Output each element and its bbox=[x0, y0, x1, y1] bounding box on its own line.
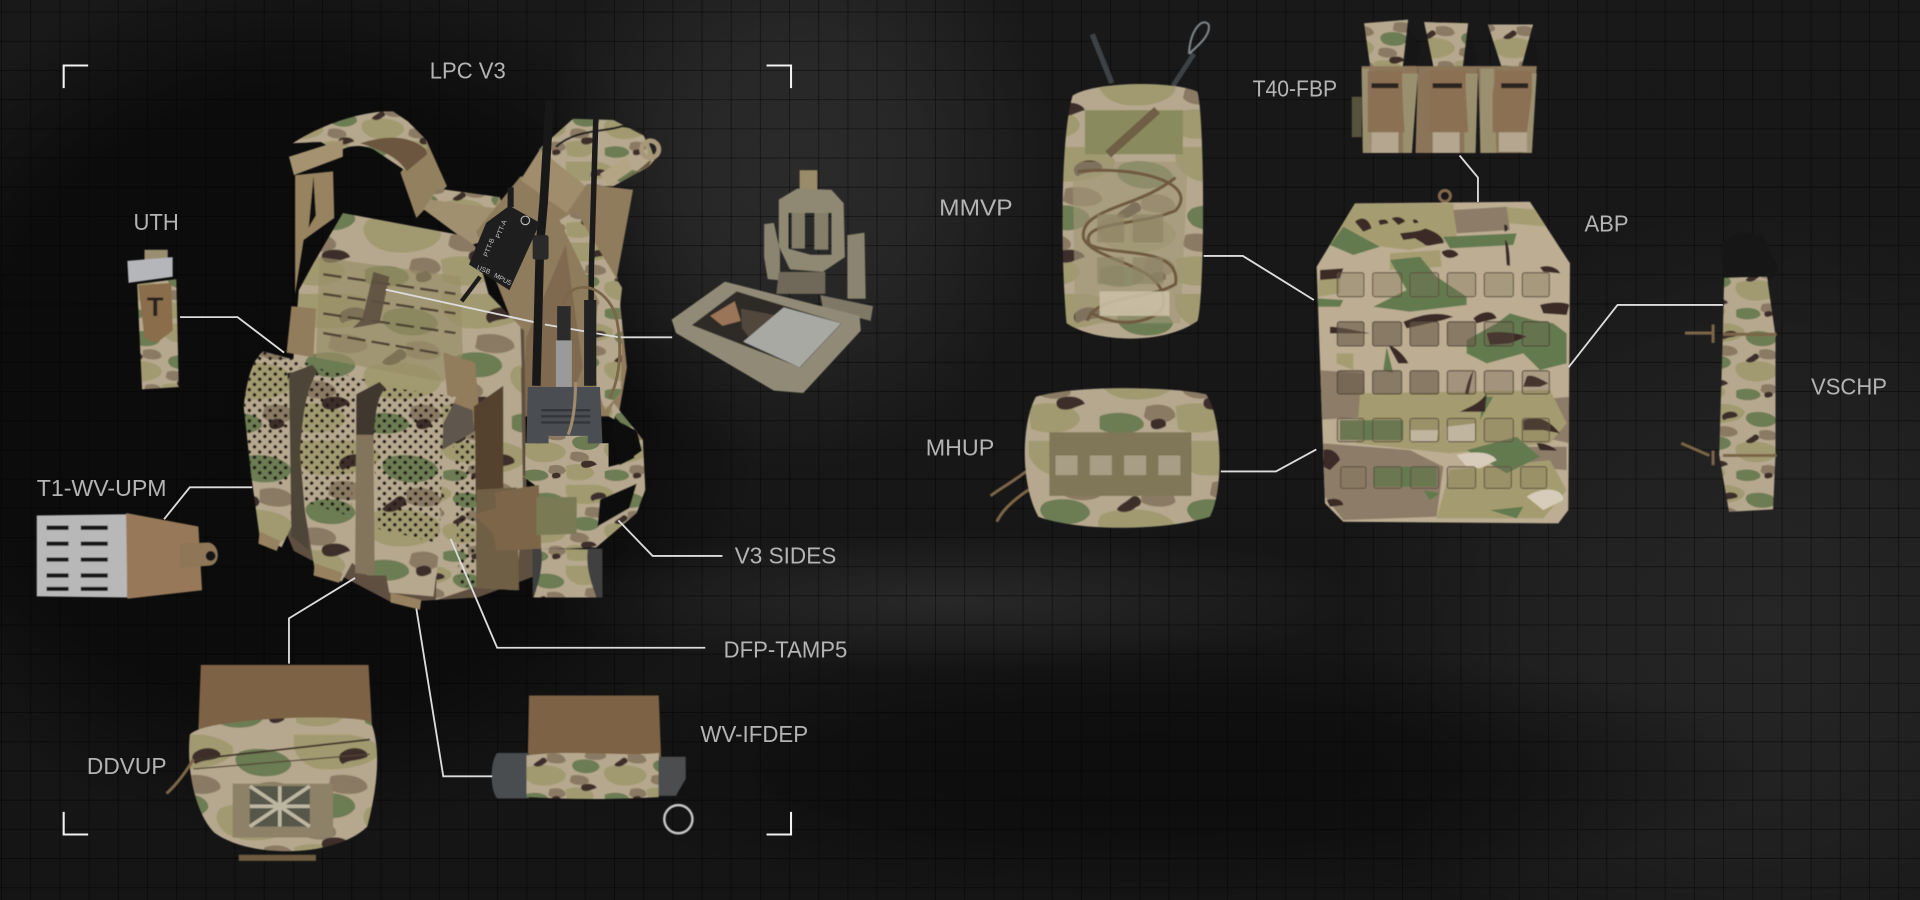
label: MMVP: MMVP bbox=[939, 195, 1013, 221]
antenna right bbox=[590, 100, 596, 386]
label: LPC V3: LPC V3 bbox=[430, 57, 506, 83]
product: DDVUP drop pouch bbox=[167, 665, 377, 861]
camo sleeve bbox=[1719, 277, 1776, 512]
callout line: T1-WV-UPM bbox=[164, 487, 252, 519]
antenna left bbox=[536, 100, 550, 386]
side belt bbox=[523, 403, 645, 550]
radio body bbox=[527, 387, 602, 443]
PTT control box: PTT-B bbox=[483, 237, 497, 258]
right shoulder strap and pad bbox=[476, 176, 633, 416]
hinge spring bbox=[776, 272, 825, 294]
pouch 1 bbox=[244, 351, 310, 547]
product: MHUP pouch bbox=[991, 388, 1220, 528]
laser-cut MOLLE panel bbox=[316, 257, 463, 382]
pouch tabs bbox=[258, 531, 421, 610]
callout line: MHUP bbox=[1221, 449, 1316, 471]
velcro flap bbox=[528, 696, 661, 762]
pouch 2 bbox=[300, 369, 366, 582]
bracket: top-right corner bbox=[767, 66, 791, 88]
callout line: UTH bbox=[180, 317, 284, 353]
zip pull bbox=[167, 759, 193, 793]
radio cable bbox=[563, 287, 620, 398]
product: radio, antennas and PTT bbox=[462, 100, 620, 479]
dark cylinder left end bbox=[492, 753, 529, 798]
body camo edges bbox=[1362, 69, 1537, 153]
pouch body bbox=[1025, 388, 1220, 528]
carrier body base bbox=[263, 294, 536, 602]
mount prongs bbox=[792, 213, 828, 250]
label: VSCHP: VSCHP bbox=[1811, 373, 1887, 399]
label: DDVUP: DDVUP bbox=[87, 753, 167, 779]
pouch bodies bbox=[1362, 66, 1418, 153]
mount tab bbox=[800, 170, 817, 192]
callout line: DDVUP bbox=[289, 578, 355, 664]
product: UTH tourniquet holder: T bbox=[147, 292, 164, 322]
callout line: V3 SIDES bbox=[618, 520, 722, 556]
mount frame bbox=[779, 189, 845, 272]
inner back X strap bbox=[560, 211, 622, 321]
antenna ferrule bbox=[533, 235, 549, 260]
lower tail panel bbox=[533, 549, 602, 598]
callout line: WV-IFDEP bbox=[416, 609, 492, 776]
label: T1-WV-UPM: T1-WV-UPM bbox=[37, 475, 167, 501]
drawstrings bbox=[991, 471, 1029, 522]
right camo side bbox=[476, 327, 523, 590]
buckles bbox=[1368, 71, 1404, 132]
product: VSCHP holster bbox=[1681, 233, 1779, 512]
tablet frame bbox=[672, 282, 861, 393]
tab bbox=[180, 542, 218, 568]
pouch body bbox=[1063, 84, 1203, 339]
callout line: VSCHP bbox=[1569, 305, 1723, 367]
product: UTH tourniquet holder bbox=[127, 250, 179, 389]
pouch 3 bbox=[373, 387, 457, 596]
silver laser-cut panel bbox=[37, 514, 127, 598]
dark cylinder right end bbox=[659, 757, 686, 796]
product: T40-FBP triple pouch bbox=[1352, 20, 1538, 153]
label: DFP-TAMP5: DFP-TAMP5 bbox=[724, 637, 847, 663]
product: WV-IFDEP pouch bbox=[492, 696, 692, 833]
top flaps bbox=[1364, 20, 1408, 76]
product: MMVP pouch bbox=[1063, 22, 1209, 339]
bungee cords bbox=[1078, 170, 1181, 321]
black top item bbox=[1722, 233, 1779, 284]
left shoulder strap bbox=[400, 140, 447, 218]
bracket: bottom-right corner bbox=[767, 812, 791, 834]
label: ABP: ABP bbox=[1584, 210, 1629, 236]
antenna connector bbox=[556, 306, 572, 387]
velcro window bbox=[1085, 110, 1183, 154]
back panel top bbox=[424, 189, 514, 245]
callout line: DFP-TAMP5 bbox=[451, 539, 705, 648]
product: ABP back panel bbox=[1317, 190, 1570, 523]
PTT control box: MPU5 bbox=[493, 272, 513, 287]
radio pouch bbox=[525, 436, 609, 479]
front plate panel bbox=[251, 213, 522, 576]
laser-cut slots row 4 and 5 bbox=[1337, 418, 1549, 488]
camo sleeve bbox=[527, 753, 659, 799]
product: LPC V3 plate carrier bbox=[244, 111, 659, 610]
product: T1-WV-UPM panel bbox=[37, 513, 218, 599]
velcro window panel bbox=[1049, 432, 1191, 496]
right camo edge bbox=[590, 288, 622, 410]
lower strap ends bbox=[1371, 132, 1527, 153]
side tag bbox=[1352, 97, 1362, 137]
union flag patch bbox=[250, 786, 310, 827]
velcro flap bbox=[198, 665, 372, 730]
callout line: T40-FBP bbox=[1460, 156, 1478, 202]
dark brush strokes bbox=[1323, 217, 1569, 507]
brown velcro flap bbox=[126, 513, 202, 599]
pull ring bbox=[664, 805, 692, 833]
PTT control box bbox=[462, 187, 540, 301]
side mag panel bbox=[436, 431, 476, 600]
antennas bbox=[1092, 34, 1112, 83]
cord ties bbox=[1681, 324, 1777, 465]
magazines bbox=[289, 365, 321, 550]
label: MHUP: MHUP bbox=[926, 435, 994, 461]
buckles bbox=[287, 306, 316, 358]
PTT control box: USB bbox=[476, 265, 492, 276]
product: tablet with folding mount bbox=[672, 170, 873, 393]
panel body bbox=[1317, 202, 1570, 523]
laser-cut slots row 1 bbox=[1337, 273, 1549, 297]
inner lower panel bbox=[1073, 162, 1188, 323]
label: UTH: UTH bbox=[133, 209, 179, 235]
tablet screen bbox=[692, 291, 842, 367]
PTT control box: PTT-A bbox=[495, 219, 509, 240]
laser-cut slots row 2 and 3 bbox=[1337, 322, 1549, 394]
label: V3 SIDES: V3 SIDES bbox=[735, 542, 836, 568]
bracket: bottom-left corner bbox=[64, 812, 88, 834]
callout line: tablet to carrier bbox=[386, 290, 672, 337]
bracket: top-left corner bbox=[64, 66, 88, 88]
callout line: MMVP bbox=[1204, 256, 1314, 300]
tablet map bbox=[743, 307, 841, 367]
side velcro bbox=[474, 386, 503, 502]
side buckle bbox=[473, 485, 541, 551]
label: T40-FBP: T40-FBP bbox=[1253, 76, 1337, 102]
patch panel bbox=[233, 784, 333, 838]
label: WV-IFDEP: WV-IFDEP bbox=[700, 721, 808, 747]
side arms bbox=[764, 223, 780, 280]
pouch body bbox=[189, 717, 377, 851]
camouflage areas bbox=[1317, 203, 1570, 520]
